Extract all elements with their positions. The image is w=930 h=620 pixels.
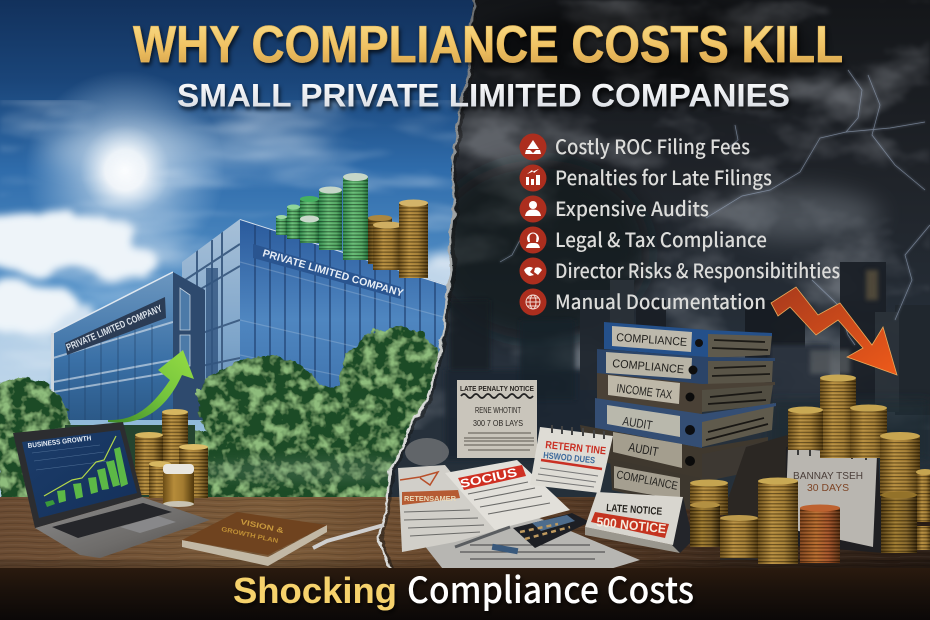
laptop screen chart bbox=[22, 430, 137, 518]
laptop screen chart: BUSINESS GROWTH bbox=[27, 435, 92, 450]
sky bbox=[0, 0, 480, 500]
building: private limited company bbox=[51, 219, 447, 420]
binder: audit blue: AUDIT bbox=[622, 414, 654, 433]
item: director risks and responsibilities: Director Risks & Responsibitihties bbox=[555, 255, 840, 284]
caption: shocking compliance costs: Compliance Costs bbox=[407, 562, 694, 614]
pen bbox=[313, 525, 384, 548]
binder: compliance 1 bbox=[604, 322, 772, 358]
subtitle: SMALL PRIVATE LIMITED COMPANIES bbox=[177, 78, 790, 114]
laptop bbox=[13, 422, 210, 558]
return time calendar: RETERN TINE bbox=[545, 439, 607, 457]
list of compliance costs bbox=[520, 131, 840, 316]
return time calendar: HSWOD DUES bbox=[543, 450, 596, 465]
book: vision and growth plan: VISION & bbox=[240, 517, 285, 535]
bottom caption band bbox=[0, 562, 930, 620]
sign right: PRIVATE LIMITED COMPANY bbox=[261, 247, 405, 300]
light side face bbox=[182, 219, 240, 380]
calendar: 30 days bbox=[785, 447, 884, 553]
right glass face bbox=[240, 219, 447, 388]
item: legal and tax compliance: Legal & Tax Compliance bbox=[555, 224, 767, 253]
white clouds bbox=[0, 210, 470, 390]
binder: compliance bottom bbox=[610, 459, 700, 512]
invoice: left sheet bbox=[398, 465, 498, 552]
caption: shocking compliance costs bbox=[233, 562, 694, 614]
scattered invoices bbox=[398, 425, 693, 578]
sign left bbox=[65, 297, 166, 355]
binder: income tax: INCOME TAX bbox=[616, 381, 673, 402]
clipboard bbox=[720, 425, 822, 560]
calendar: 30 days: 30 DAYS bbox=[807, 483, 849, 494]
gold coin stacks and jar, left bbox=[135, 409, 208, 507]
binder: income tax bbox=[597, 373, 775, 414]
calendar: 30 days: BANNAY TSEH bbox=[793, 471, 863, 482]
book: vision and growth plan: GROWTH PLAN bbox=[221, 526, 279, 545]
binder: audit brown: AUDIT bbox=[627, 440, 660, 459]
sign left: PRIVATE LIMITED COMPANY bbox=[65, 303, 164, 354]
invoice: red stamp: SOCIUS bbox=[459, 465, 518, 491]
growth arrow bbox=[108, 350, 194, 423]
penalty notice paper bbox=[457, 380, 537, 458]
stacked binders bbox=[580, 322, 776, 512]
rooftop coin stacks bbox=[276, 173, 428, 278]
item: costly ROC filing fees: Costly ROC Filing Fees bbox=[555, 131, 750, 160]
lightning bolts bbox=[500, 70, 930, 345]
penalty notice paper: 300 7 OB LAYS bbox=[473, 418, 523, 428]
binder: compliance 2 bbox=[597, 349, 775, 386]
paper roll bbox=[405, 438, 449, 466]
left wing bbox=[53, 272, 173, 420]
title: WHY COMPLIANCE COSTS KILL bbox=[133, 16, 843, 74]
late notice card bbox=[585, 492, 693, 553]
city skyline bbox=[445, 262, 930, 460]
pen on invoices bbox=[455, 527, 510, 547]
late notice card: LATE NOTICE bbox=[606, 502, 662, 518]
panel: bright optimistic left scene bbox=[0, 0, 480, 510]
sun bbox=[31, 76, 218, 250]
late notice card: 500 NOTICE bbox=[596, 514, 667, 536]
trees bbox=[0, 326, 438, 497]
calculator bbox=[513, 513, 590, 548]
torn paper edge bbox=[378, 0, 476, 570]
item: manual documentation: Manual Documentation bbox=[555, 286, 766, 315]
book: vision and growth plan bbox=[182, 512, 327, 566]
binder: compliance 2: COMPLIANCE bbox=[612, 358, 685, 376]
return time calendar bbox=[530, 425, 613, 493]
falling red arrow bbox=[771, 287, 897, 375]
invoice: left sheet: RETENSAMER bbox=[404, 496, 456, 503]
penalty notice paper: RENE WHOTINT bbox=[475, 406, 521, 415]
invoice: bottom sheet bbox=[420, 510, 640, 578]
invoice: red stamp bbox=[445, 460, 570, 530]
binder: audit blue bbox=[595, 398, 776, 448]
binder: audit brown bbox=[580, 425, 768, 484]
binder: compliance bottom: COMPLIANCE bbox=[615, 469, 679, 493]
binder: compliance 1: COMPLIANCE bbox=[616, 332, 688, 349]
caption: shocking compliance costs: Shocking bbox=[233, 570, 397, 611]
gold coin stacks, right bbox=[690, 374, 930, 564]
jar bbox=[163, 464, 194, 507]
item: expensive audits: Expensive Audits bbox=[555, 193, 709, 222]
penalty notice paper: LATE PENALTY NOTICE bbox=[460, 384, 534, 393]
entrance block bbox=[173, 272, 205, 420]
table top bbox=[0, 497, 930, 569]
item: penalties for late filings: Penalties for Late Filings bbox=[555, 162, 772, 191]
